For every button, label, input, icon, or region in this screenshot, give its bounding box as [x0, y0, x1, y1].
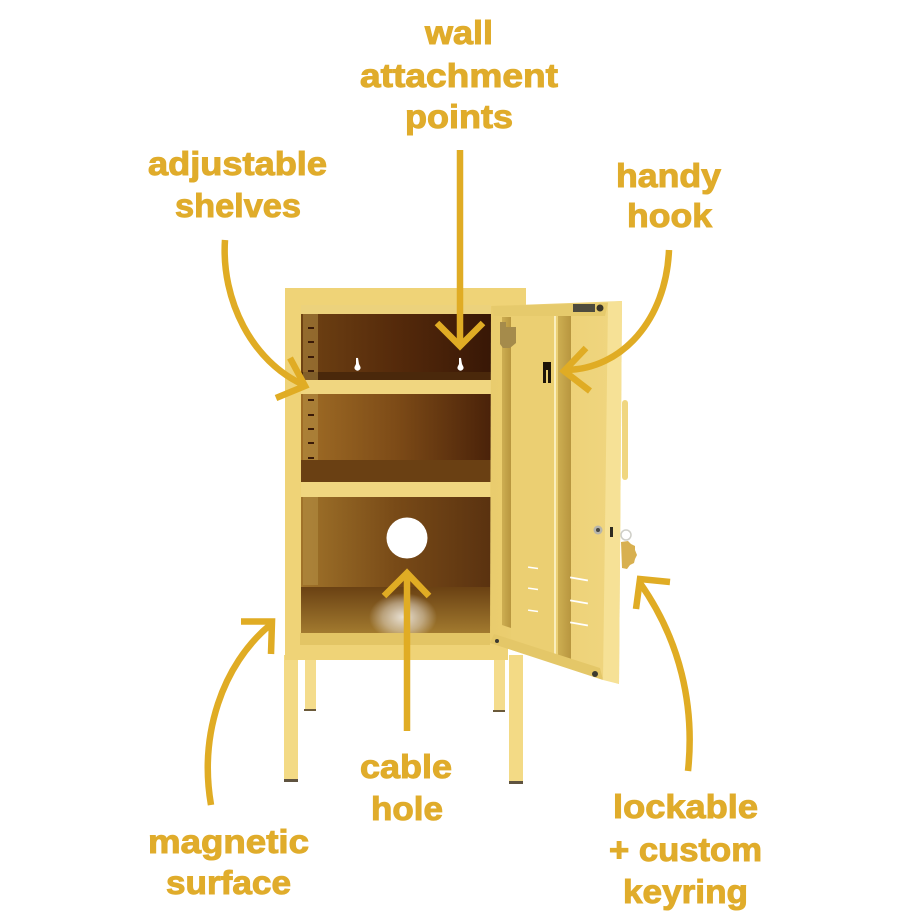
label: lockable + custom keyring: keyring	[623, 873, 748, 910]
bottom lip	[300, 633, 490, 645]
label: cable hole	[360, 748, 452, 827]
cabinet frame	[285, 288, 526, 660]
door screws	[495, 639, 598, 677]
door inner shading	[502, 317, 511, 628]
upper shelf	[301, 380, 491, 394]
front legs	[284, 655, 523, 784]
open door	[490, 301, 622, 684]
locker cabinet	[284, 288, 637, 784]
cable hole	[386, 518, 428, 558]
label: wall attachment points: attachment	[360, 57, 558, 94]
upper compartment	[301, 314, 491, 380]
arrow: handy hook	[564, 250, 669, 391]
lower shelf	[301, 482, 490, 497]
label: handy hook	[616, 157, 722, 234]
back legs	[304, 658, 505, 712]
label: magnetic surface	[148, 823, 309, 901]
middle compartment	[301, 394, 491, 482]
wall attachment holes	[354, 358, 464, 371]
arrow: cable hole	[384, 573, 429, 731]
door label plate	[573, 304, 604, 312]
door centre panel	[511, 316, 555, 654]
arrow: wall attachment points	[437, 150, 483, 346]
label: lockable + custom keyring	[609, 788, 762, 910]
arrow: lockable and keyring	[636, 579, 690, 771]
arrow: magnetic surface	[208, 622, 272, 805]
door front edge	[603, 301, 622, 684]
label: cable hole: cable	[360, 748, 452, 785]
label: wall attachment points: wall	[424, 14, 493, 51]
label: cable hole: hole	[371, 790, 443, 827]
door top strip	[492, 303, 608, 316]
label: adjustable shelves: shelves	[175, 187, 301, 224]
hinge	[500, 322, 516, 348]
shelf slots	[303, 314, 318, 585]
door bottom strip	[490, 634, 603, 680]
door vents	[528, 566, 588, 626]
label: handy hook: handy	[616, 157, 722, 194]
label: magnetic surface: surface	[166, 864, 291, 901]
label: wall attachment points: points	[405, 98, 513, 135]
label: magnetic surface: magnetic	[148, 823, 309, 860]
label: adjustable shelves: adjustable	[148, 145, 327, 182]
top lip	[301, 305, 491, 314]
custom keyring tag	[621, 541, 637, 569]
lower compartment	[301, 497, 491, 641]
label: lockable + custom keyring: lockable	[613, 788, 758, 825]
handy hook	[543, 362, 551, 383]
arrow: adjustable shelves	[225, 240, 305, 398]
label: lockable + custom keyring: + custom	[609, 831, 762, 868]
label: handy hook: hook	[627, 197, 713, 234]
lock and key	[594, 526, 637, 569]
label: adjustable shelves	[148, 145, 327, 224]
door handle	[622, 400, 628, 480]
label: wall attachment points	[360, 14, 558, 135]
